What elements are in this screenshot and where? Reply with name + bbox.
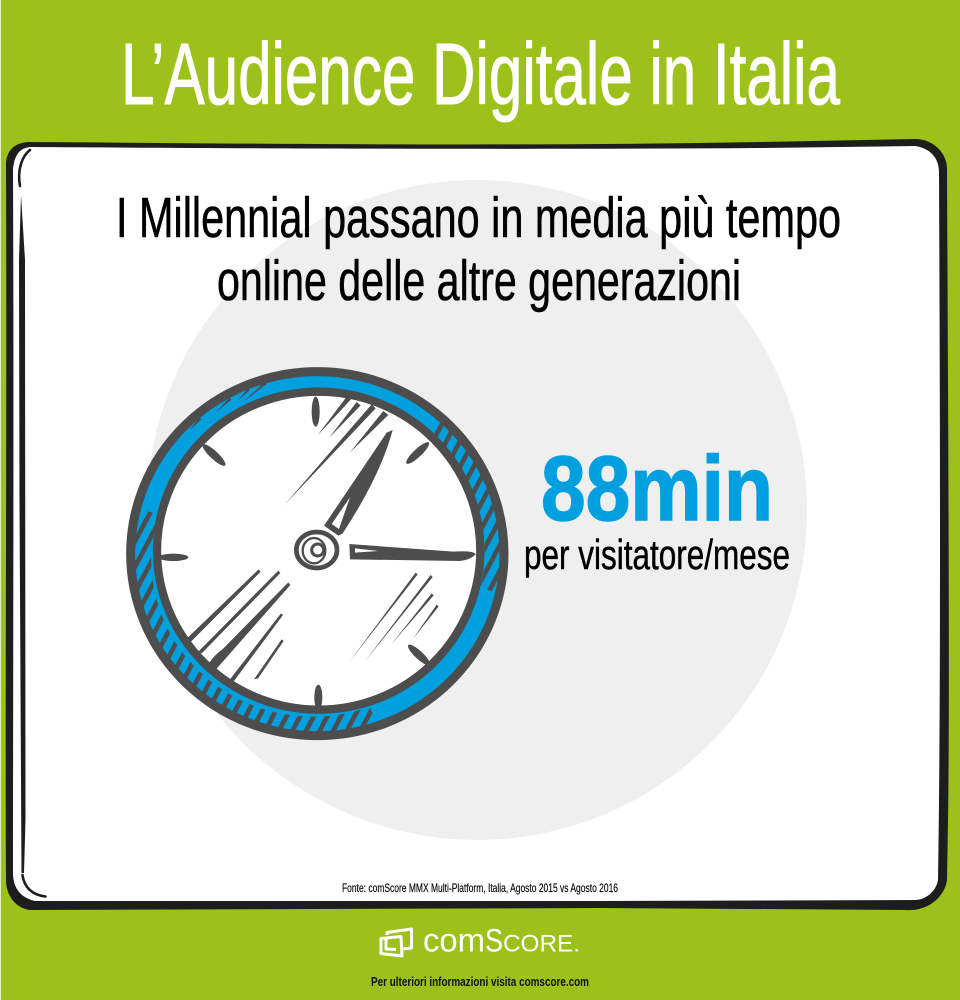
clock face <box>157 392 480 710</box>
icon: clock <box>131 372 504 736</box>
clock glare strokes <box>187 397 439 681</box>
stat: 88min: 88min <box>541 438 773 540</box>
clock blue ring <box>131 372 504 736</box>
panel: sketched white frame <box>6 139 949 910</box>
logo icon <box>381 929 412 956</box>
clock hour ticks <box>158 397 432 710</box>
source note: Fonte: comScore MMX Multi-Platform, Italia, Agosto 2015 vs Agosto 2016 <box>342 881 618 895</box>
logo wordmark: com <box>423 922 485 958</box>
clock minute hand <box>324 430 393 536</box>
clock ring sketch strokes <box>189 383 267 431</box>
subtitle heading: online delle altre generazioni <box>217 249 741 313</box>
clock centre pin <box>296 532 337 568</box>
subtitle heading <box>116 186 841 313</box>
logo: comScore <box>381 922 580 958</box>
clock ring hatching <box>136 423 500 732</box>
clock outer outline <box>131 372 504 736</box>
logo wordmark: CORE. <box>503 930 580 958</box>
clock hour hand <box>349 544 476 561</box>
stat label: per visitatore/mese <box>524 531 790 578</box>
background grey circle <box>147 180 807 840</box>
logo wordmark: S <box>485 922 503 958</box>
footer link text: Per ulteriori informazioni visita comscore.com <box>371 975 589 989</box>
